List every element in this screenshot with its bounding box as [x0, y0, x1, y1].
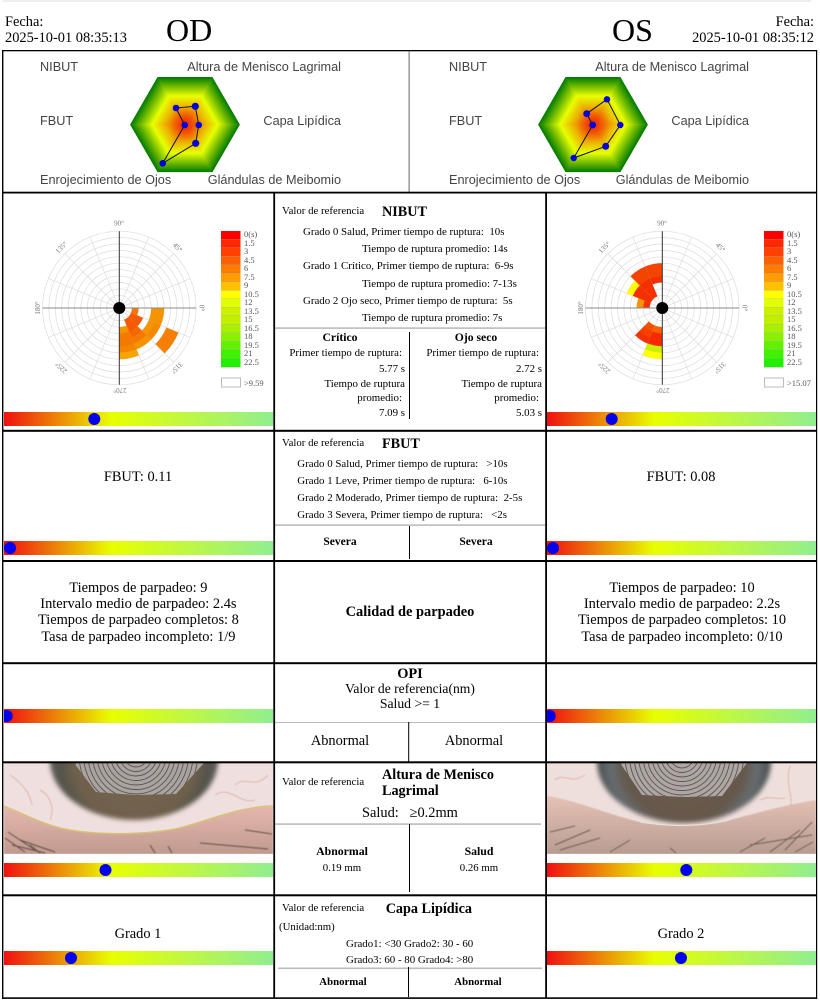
header: OS title: OS [612, 12, 653, 48]
polar angle labels OS: 225° [597, 360, 612, 375]
header: OS date: Fecha: [776, 14, 814, 30]
NIBUT grades text: Grado 1 Crítico, Primer tiempo de ruptura: 6-9s [303, 260, 514, 272]
FBUT grades text: Grado 2 Moderado, Primer tiempo de ruptura: 2-5s [297, 492, 522, 504]
colour bar: OS OPI [544, 709, 816, 723]
colour legend OS: 3 [787, 246, 791, 256]
NIBUT OD result: Crítico: 5.77 s [379, 363, 405, 375]
FBUT value OD: FBUT: 0.11 [104, 469, 172, 485]
colour legend OD: 3 [244, 246, 248, 256]
colour bar: OS lipid [547, 951, 816, 965]
radar labels OD: FBUT [40, 114, 73, 128]
OPI heading and reference [345, 666, 475, 711]
blink stats OS: Intervalo medio de parpadeo: 2.2s [584, 596, 780, 612]
radar hexagon OD [131, 77, 239, 172]
colour legend OD: 10.5 [244, 289, 259, 299]
blink stats OD: Tiempos de parpadeo: 9 [69, 580, 207, 596]
polar axes OS [586, 231, 739, 385]
header: OS date [692, 14, 814, 46]
NIBUT OS result: Ojo seco [426, 331, 542, 419]
NIBUT grades text [303, 226, 517, 324]
polar angle labels OD: 135° [54, 240, 69, 255]
NIBUT grades text: Tiempo de ruptura promedio: 14s [362, 243, 508, 255]
FBUT value OS: FBUT: 0.08 [647, 469, 715, 485]
panel: tear meniscus reference [275, 767, 541, 892]
blink stats OD [38, 580, 239, 645]
NIBUT OD result: Crítico: Crítico [322, 331, 358, 344]
radar labels OS: FBUT [449, 114, 482, 128]
colour bar: OD OPI [1, 709, 273, 723]
blink stats OS: Tiempos de parpadeo: 10 [609, 580, 755, 596]
lipid OD result: Abnormal [319, 976, 367, 988]
colour legend OS: 21 [787, 348, 796, 358]
polar angle labels OD: 45° [171, 241, 184, 254]
FBUT grades text: Grado 1 Leve, Primer tiempo de ruptura: 6-10s [297, 475, 508, 487]
colour legend OD: 18 [244, 331, 252, 341]
radar data polygon OS [570, 96, 624, 161]
NIBUT OS result: Ojo seco: Primer tiempo de ruptura: [426, 347, 539, 359]
blink stats OS: Tiempos de parpadeo completos: 10 [578, 612, 786, 628]
radar labels OD [40, 60, 342, 187]
lipid layer grade OS: Grado 2 [658, 926, 704, 942]
blink quality heading: Calidad de parpadeo [346, 604, 474, 620]
radar data polygon OD [159, 103, 202, 167]
header: OD date [5, 14, 127, 46]
polar angle labels OD: 180° [34, 301, 42, 315]
radar labels OS: Altura de Menisco Lagrimal [595, 60, 749, 74]
panel: lipid layer reference [278, 901, 542, 997]
colour legend OS: 1.5 [787, 238, 798, 248]
colour legend OD: 19.5 [244, 340, 259, 350]
colour legend OS: 15 [787, 314, 796, 324]
colour legend OS [764, 229, 811, 388]
meniscus OD result: Abnormal [316, 844, 369, 858]
polar angle labels OD: 90° [114, 220, 124, 228]
lipid grades [346, 938, 474, 966]
colour legend OD: 22.5 [244, 357, 259, 367]
panel: OPI reference [275, 666, 545, 762]
NIBUT OD result: Crítico: promedio: [357, 392, 402, 404]
meniscus heading [282, 767, 494, 799]
radar labels OD: Enrojecimiento de Ojos [40, 173, 171, 187]
FBUT grades text [297, 458, 522, 521]
lipid grades: Grado1: <30 Grado2: 30 - 60 [346, 938, 474, 950]
meniscus heading: Lagrimal [382, 783, 439, 799]
colour legend OD: 15 [244, 314, 252, 324]
FBUT OS result: Severa [459, 536, 493, 548]
polar angle labels OS [577, 220, 748, 394]
polar chart: OS NIBUT [577, 220, 811, 394]
NIBUT OS result: Ojo seco: Tiempo de ruptura [461, 378, 542, 390]
NIBUT OS result: Ojo seco: 2.72 s [516, 363, 542, 375]
polar angle labels OS: 45° [714, 241, 727, 254]
FBUT grades text: Grado 3 Severa, Primer tiempo de ruptura: <2s [297, 509, 507, 521]
radar panel: OD [40, 60, 342, 187]
polar angle labels OS: 270° [656, 386, 670, 394]
colour legend OS: 6 [787, 263, 791, 273]
FBUT OD result: Severa [323, 536, 357, 548]
colour legend OD: 7.5 [244, 272, 255, 282]
polar angle labels OS: 90° [657, 220, 667, 228]
radar labels OS: Glándulas de Meibomio [616, 173, 749, 187]
NIBUT OD result: Crítico [289, 331, 405, 419]
colour legend OS: 9 [787, 280, 791, 290]
colour bar: OD lipid [4, 951, 273, 965]
meniscus healthy threshold: Salud: ≥0.2mm [362, 805, 458, 821]
OPI heading and reference: Valor de referencia(nm) [345, 681, 475, 697]
polar angle labels OD: 225° [54, 360, 69, 375]
NIBUT grades text: Tiempo de ruptura promedio: 7-13s [362, 278, 517, 290]
header: OD date: Fecha: [5, 14, 43, 30]
colour legend OS: 10.5 [787, 289, 802, 299]
radar labels OS: Enrojecimiento de Ojos [449, 173, 580, 187]
NIBUT OS result: Ojo seco: 5.03 s [516, 407, 542, 419]
polar angle labels OS: 315° [712, 360, 727, 375]
colour legend OS: 7.5 [787, 272, 798, 282]
colour legend OD: 9 [244, 280, 248, 290]
FBUT heading: Valor de referencia [282, 437, 364, 449]
colour legend OD [221, 229, 264, 388]
meniscus OD result [316, 844, 369, 874]
meniscus OD result: 0.19 mm [323, 862, 362, 874]
lipid layer grade OD: Grado 1 [115, 926, 161, 942]
OPI heading and reference: OPI [397, 666, 423, 682]
blink stats OD: Intervalo medio de parpadeo: 2.4s [40, 596, 237, 612]
NIBUT heading: NIBUT [382, 204, 427, 220]
polar angle labels OD: 315° [169, 360, 184, 375]
eye photo OD [4, 763, 273, 854]
polar angle labels OS: 0° [740, 305, 748, 311]
FBUT heading: FBUT [382, 436, 420, 452]
colour legend OD: 21 [244, 348, 252, 358]
blink stats OD: Tasa de parpadeo incompleto: 1/9 [41, 629, 235, 645]
NIBUT OS result: Ojo seco: promedio: [494, 392, 539, 404]
header: OD title: OD [166, 12, 212, 48]
lipid heading: Valor de referencia [282, 902, 364, 914]
OPI OS result: Abnormal [445, 733, 503, 749]
polar angle labels OS: 135° [597, 240, 612, 255]
meniscus OS result [460, 844, 499, 874]
polar angle labels OD: 270° [113, 386, 127, 394]
panel: FBUT reference [275, 436, 545, 559]
lipid OS result: Abnormal [454, 976, 502, 988]
radar labels OD: Altura de Menisco Lagrimal [187, 60, 341, 74]
NIBUT OS result: Ojo seco: Ojo seco [455, 331, 497, 344]
NIBUT heading [282, 204, 427, 220]
lipid heading [279, 901, 472, 933]
colour legend OD: 13.5 [244, 306, 259, 316]
polar angle labels OD [34, 220, 205, 394]
colour legend OS: 12 [787, 297, 796, 307]
blink stats OD: Tiempos de parpadeo completos: 8 [38, 612, 239, 628]
top decorative band [3, 0, 811, 2]
lipid heading: (Unidad:nm) [279, 921, 335, 933]
FBUT heading [282, 436, 420, 452]
polar grid OD [42, 231, 196, 385]
polar grid OS [586, 231, 739, 385]
colour bar: OD FBUT [4, 541, 273, 555]
lipid grades: Grado3: 60 - 80 Grado4: >80 [346, 954, 474, 966]
wedges OD [40, 229, 199, 387]
header: OD date: 2025-10-01 08:35:13 [5, 30, 127, 46]
blink stats OS: Tasa de parpadeo incompleto: 0/10 [581, 629, 783, 645]
colour legend OD: 1.5 [244, 238, 255, 248]
colour legend OD: >9.59 [244, 378, 264, 388]
colour legend OS: 16.5 [787, 323, 802, 333]
radar labels OS [449, 60, 750, 187]
colour bar: OS NIBUT [547, 412, 816, 426]
meniscus OS result: Salud [465, 844, 494, 858]
radar labels OD: Capa Lipídica [263, 114, 342, 128]
radar panel: OS [449, 60, 750, 187]
colour legend OD: 12 [244, 297, 252, 307]
eye photo OS [547, 763, 816, 854]
colour legend OS: 19.5 [787, 340, 802, 350]
colour bar: OS meniscus [547, 863, 816, 877]
header: OS date: 2025-10-01 08:35:12 [692, 30, 814, 46]
colour legend OS: 18 [787, 331, 796, 341]
blink stats OS [578, 580, 786, 645]
colour bar: OD meniscus [4, 863, 273, 877]
polar axes OD [42, 231, 196, 385]
polar angle labels OD: 0° [197, 305, 205, 311]
polar angle labels OS: 180° [577, 301, 585, 315]
colour legend OS: 22.5 [787, 357, 802, 367]
FBUT grades text: Grado 0 Salud, Primer tiempo de ruptura: >10s [297, 458, 508, 470]
colour legend OD: 16.5 [244, 323, 259, 333]
colour legend OD: 4.5 [244, 255, 255, 265]
OPI heading and reference: Salud >= 1 [380, 696, 440, 711]
radar labels OD: Glándulas de Meibomio [208, 173, 341, 187]
colour legend OS: 0(s) [787, 229, 800, 239]
polar chart: OD NIBUT [34, 220, 264, 394]
colour bar: OS FBUT [547, 541, 816, 555]
colour legend OS: >15.07 [787, 378, 811, 388]
wedges OS [603, 249, 721, 367]
colour bar: OD NIBUT [4, 412, 273, 426]
radar labels OS: Capa Lipídica [671, 114, 750, 128]
meniscus OS result: 0.26 mm [460, 862, 499, 874]
radar labels OD: NIBUT [40, 60, 78, 74]
NIBUT grades text: Tiempo de ruptura promedio: 7s [362, 312, 502, 324]
NIBUT grades text: Grado 2 Ojo seco, Primer tiempo de ruptura: 5s [303, 295, 513, 307]
NIBUT heading: Valor de referencia [282, 205, 364, 217]
radar hexagon OS [539, 77, 647, 172]
meniscus heading: Valor de referencia [282, 776, 364, 788]
meniscus heading: Altura de Menisco [382, 767, 494, 783]
NIBUT OD result: Crítico: Tiempo de ruptura [324, 378, 405, 390]
colour legend OD: 6 [244, 263, 248, 273]
lipid heading: Capa Lipídica [386, 901, 472, 917]
OPI OD result: Abnormal [311, 733, 369, 749]
NIBUT OD result: Crítico: 7.09 s [379, 407, 405, 419]
NIBUT grades text: Grado 0 Salud, Primer tiempo de ruptura: 10s [303, 226, 504, 238]
radar labels OS: NIBUT [449, 60, 487, 74]
panel: NIBUT reference [275, 204, 545, 419]
NIBUT OD result: Crítico: Primer tiempo de ruptura: [289, 347, 402, 359]
colour legend OS: 13.5 [787, 306, 802, 316]
colour legend OD: 0(s) [244, 229, 257, 239]
colour legend OS: 4.5 [787, 255, 798, 265]
